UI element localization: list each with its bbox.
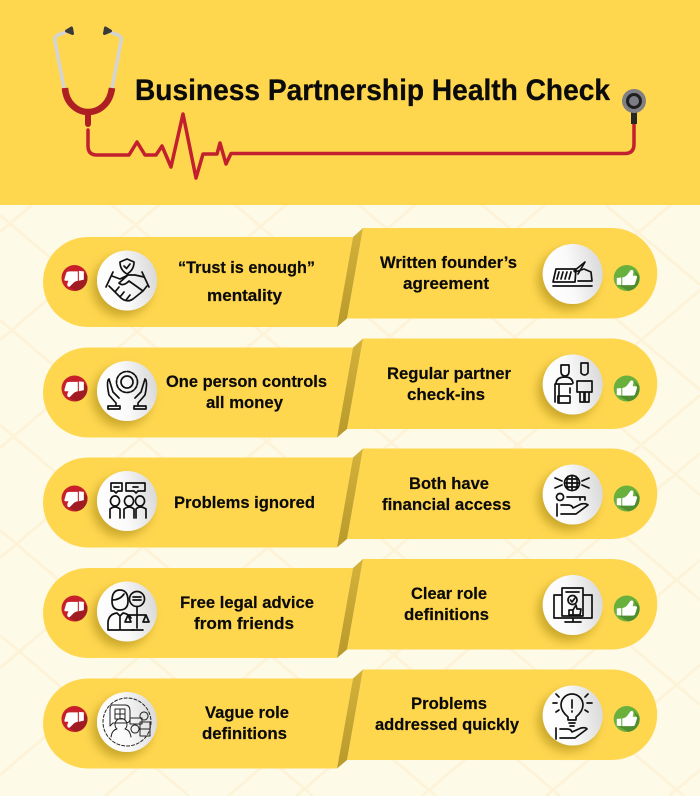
- right pill 2: [347, 338, 657, 429]
- icon disc: partners at desk: [543, 354, 603, 414]
- text: clear role: Clear role: [411, 584, 487, 603]
- text: mentality: mentality: [207, 286, 283, 305]
- thumb down 5: [62, 706, 88, 732]
- text: one person controls: One person controls: [166, 372, 327, 391]
- text: all money: all money: [206, 393, 284, 412]
- thumb up 1: [614, 265, 640, 291]
- thumb up 4: [614, 596, 640, 622]
- text: check-ins: check-ins: [407, 385, 485, 404]
- icon disc: contract: [543, 244, 603, 304]
- text: free legal advice: Free legal advice: [180, 593, 314, 612]
- icon: stethoscope with heartbeat line: [55, 28, 646, 178]
- right pill 5: [347, 670, 657, 760]
- icon disc: hands and gear: [97, 361, 157, 421]
- icon disc: vague roles: [97, 692, 157, 752]
- text: problems: Problems: [411, 694, 487, 713]
- thumb down 4: [62, 596, 88, 622]
- thumb up 3: [614, 486, 640, 512]
- icon disc: handshake: [97, 250, 157, 310]
- icon disc: idea lightbulb in hand: [543, 686, 603, 746]
- icon disc: lawyer and scales: [97, 582, 157, 642]
- thumb up 5: [614, 706, 640, 732]
- header band: [0, 0, 700, 205]
- fold 4: [337, 559, 363, 658]
- row 3: [43, 448, 657, 548]
- fold 3: [337, 448, 363, 548]
- row 5: [43, 670, 657, 768]
- text: financial access: financial access: [382, 495, 511, 514]
- text: vague role: Vague role: [205, 703, 289, 722]
- right pill 3: [347, 448, 657, 539]
- row 1: [43, 228, 657, 327]
- left pill 4: [43, 568, 353, 658]
- left pill 2: [43, 348, 353, 438]
- thumb down 1: [62, 265, 88, 291]
- thumb down 2: [62, 376, 88, 402]
- text: definitions right: definitions: [404, 605, 489, 624]
- right pill 4: [347, 559, 657, 650]
- left pill 1: [43, 237, 353, 327]
- thumb up 2: [614, 376, 640, 402]
- text: regular partner: Regular partner: [387, 364, 511, 383]
- icon disc: document on monitor: [543, 575, 603, 635]
- left pill 3: [43, 458, 353, 548]
- icon disc: globe, key and hand: [543, 464, 603, 524]
- fold 1: [337, 228, 363, 327]
- row 4: [43, 559, 657, 658]
- text: both have: Both have: [409, 474, 489, 493]
- text: definitions left: definitions: [202, 724, 287, 743]
- text: written founder's: Written founder’s: [380, 253, 517, 272]
- fold 5: [337, 670, 363, 768]
- icon disc: people talking: [97, 471, 157, 531]
- text: from friends: from friends: [194, 614, 294, 633]
- left pill 5: [43, 678, 353, 768]
- text: agreement: agreement: [403, 274, 489, 293]
- thumb down 3: [62, 486, 88, 512]
- text: problems ignored: Problems ignored: [174, 493, 315, 512]
- text: addressed quickly: addressed quickly: [375, 715, 520, 734]
- text: trust is enough: “Trust is enough”: [178, 258, 315, 277]
- fold 2: [337, 338, 363, 438]
- title: Business Partnership Health Check: [135, 74, 611, 107]
- row 2: [43, 338, 657, 438]
- right pill 1: [347, 228, 657, 318]
